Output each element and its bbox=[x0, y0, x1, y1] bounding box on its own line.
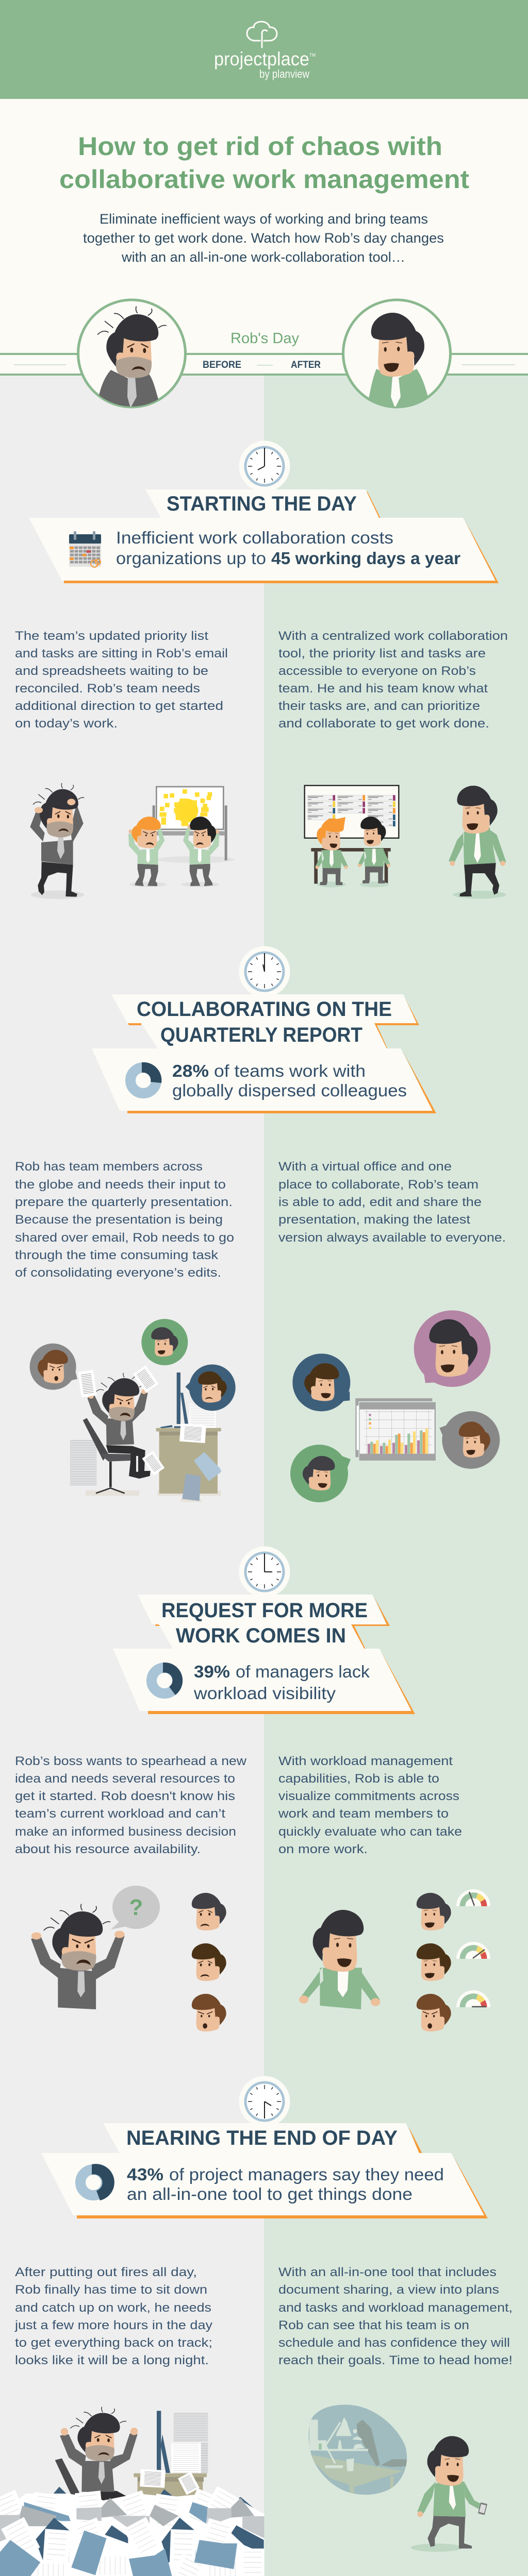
stat panel: 28 percent bbox=[92, 1048, 436, 1113]
text: end of day before: to get everything back on track; bbox=[15, 2336, 212, 2350]
text: request for more work after: quickly evaluate who can take bbox=[278, 1825, 462, 1839]
stat panel: 28 percent: globally dispersed colleagues bbox=[172, 1081, 407, 1100]
text: request for more work before: idea and needs several resources to bbox=[15, 1772, 235, 1786]
speech bubble: gray colleague bbox=[30, 1344, 77, 1390]
text: end of day after: Rob can see that his team is on bbox=[278, 2318, 469, 2332]
banner: starting the day heading bbox=[145, 489, 382, 520]
stat panel: 45 working days bbox=[29, 518, 499, 583]
background: left before column bbox=[0, 376, 264, 2576]
banner: request for more work heading: WORK COMES IN bbox=[176, 1624, 346, 1647]
intro panel bbox=[0, 99, 528, 376]
icon: phone bbox=[478, 2502, 487, 2515]
banner: nearing the end of day heading: NEARING THE END OF DAY bbox=[126, 2127, 398, 2149]
stat panel: 45 working days: Inefficient work collaboration costs bbox=[116, 528, 393, 547]
text: quarterly report after: place to collaborate, Rob’s team bbox=[278, 1178, 478, 1192]
text: request for more work before: Rob’s boss wants to spearhead a new bbox=[15, 1754, 247, 1768]
text: end of day before bbox=[14, 2265, 212, 2367]
text: starting the day before: additional direction to get started bbox=[15, 699, 223, 713]
text: starting the day before: and tasks are sitting in Rob’s email bbox=[15, 647, 228, 660]
text: quarterly report before: prepare the quarterly presentation. bbox=[15, 1195, 233, 1209]
chair bbox=[83, 1418, 133, 1493]
stat panel: 39 percent: 39% bbox=[194, 1662, 230, 1681]
figure: Rob seated, arms raised bbox=[87, 1373, 151, 1479]
intro text: with an an all-in-one work-collaboration tool… bbox=[121, 249, 405, 265]
floor shadows bbox=[86, 1490, 221, 1502]
text: quarterly report after: With a virtual office and one bbox=[278, 1160, 452, 1174]
text: end of day after: document sharing, a view into plans bbox=[278, 2283, 499, 2297]
text: request for more work after: on more work. bbox=[278, 1842, 368, 1856]
speech bubble: purple Rob bbox=[414, 1310, 490, 1387]
text: starting the day after: accessible to everyone on Rob’s bbox=[278, 664, 476, 678]
text: starting the day after bbox=[278, 629, 508, 731]
text: starting the day before: and spreadsheets waiting to be bbox=[15, 664, 208, 678]
text: quarterly report before bbox=[15, 1160, 234, 1280]
text: end of day before: Rob finally has time to sit down bbox=[15, 2283, 207, 2297]
paper stack on floor bbox=[43, 1440, 123, 1485]
header band bbox=[0, 0, 528, 99]
speech bubble: green colleague bbox=[141, 1319, 188, 1365]
heads: stressed team bbox=[192, 1893, 226, 2031]
title: collaborative work management bbox=[59, 165, 469, 194]
text: starting the day before bbox=[15, 629, 228, 731]
speech bubble: question mark: ? bbox=[129, 1895, 143, 1920]
text: end of day before: looks like it will be a long night. bbox=[15, 2353, 209, 2367]
illustration: Rob at desk overwhelmed by colleagues bbox=[30, 1319, 236, 1502]
text: starting the day after: and collaborate to get work done. bbox=[278, 717, 489, 731]
text: starting the day before: The team’s updated priority list bbox=[15, 629, 208, 643]
banner: collaborating heading: QUARTERLY REPORT bbox=[160, 1024, 362, 1046]
monitor bbox=[160, 1372, 188, 1428]
figure: dark-haired teammate bbox=[182, 817, 219, 887]
text: end of day before: After putting out fires all day, bbox=[15, 2265, 197, 2279]
text: starting the day after: With a centralized work collaboration bbox=[278, 629, 508, 643]
text: quarterly report before: through the time consuming task bbox=[15, 1248, 219, 1262]
text: quarterly report after: version always available to everyone. bbox=[278, 1231, 506, 1245]
text: request for more work before: make an informed business decision bbox=[15, 1825, 236, 1839]
portrait: Rob before bbox=[78, 300, 186, 410]
icon: cloud tree bbox=[247, 22, 277, 47]
text: quarterly report before: of consolidating everyone’s edits. bbox=[15, 1266, 221, 1280]
logo: projectplace header bbox=[214, 22, 316, 80]
pile of papers and folders bbox=[0, 2486, 266, 2576]
heading: Rob's Day: Rob's Day bbox=[230, 330, 299, 347]
figure: happy Rob with phone bbox=[411, 2436, 487, 2552]
banner: collaborating heading: COLLABORATING ON THE bbox=[137, 998, 392, 1021]
banner: collaborating heading bbox=[111, 994, 419, 1052]
illustration: team at organised board and happy Rob bbox=[305, 786, 506, 899]
figure: happy Rob bbox=[449, 786, 506, 899]
illustration: Rob buried in paperwork bbox=[0, 2407, 266, 2576]
text: end of day after: and tasks and workload management, bbox=[278, 2301, 513, 2315]
figure: happy orange-haired teammate bbox=[316, 817, 348, 887]
speech bubble: question mark bbox=[111, 1886, 160, 1929]
figure: stressed Rob bbox=[30, 783, 84, 899]
text: starting the day after: their tasks are, and can prioritize bbox=[278, 699, 480, 713]
stat panel: 28 percent: 28% bbox=[172, 1061, 209, 1080]
text: request for more work before: team’s current workload and can’t bbox=[15, 1807, 225, 1821]
banner: request for more work heading: REQUEST FOR MORE bbox=[161, 1599, 368, 1622]
illustration: Rob heading home with phone bbox=[306, 2405, 487, 2552]
text: request for more work after: visualize commitments across bbox=[278, 1789, 459, 1803]
folders on floor bbox=[182, 1452, 221, 1501]
label: before: BEFORE bbox=[203, 360, 241, 370]
speech bubble: blue colleague bbox=[185, 1364, 236, 1411]
text: end of day after: schedule and has confidence they will bbox=[278, 2336, 510, 2350]
stat panel: 45 working days: organizations up to bbox=[116, 549, 266, 568]
clock: starting the day bbox=[239, 441, 290, 492]
text: request for more work before: about his resource availability. bbox=[15, 1842, 201, 1856]
intro text: together to get work done. Watch how Rob’s day changes bbox=[83, 230, 444, 246]
stat panel: 28 percent: of teams work with bbox=[214, 1061, 366, 1080]
stat panel: 39 percent: workload visibility bbox=[193, 1684, 336, 1703]
clock: nearing the end of day bbox=[239, 2076, 290, 2127]
stat panel: 43 percent: of project managers say they need bbox=[169, 2165, 444, 2184]
text: starting the day after: team. He and his team know what bbox=[278, 682, 488, 696]
organised task board bbox=[305, 786, 399, 838]
stat panel: 39 percent bbox=[113, 1649, 415, 1714]
logo wordmark: projectplace bbox=[214, 48, 309, 70]
chart: donut 39 percent bbox=[152, 1663, 183, 1695]
banner: nearing the end of day heading bbox=[103, 2123, 423, 2155]
background: right after column bbox=[264, 376, 528, 2576]
text: quarterly report before: shared over email, Rob needs to go bbox=[15, 1231, 234, 1245]
text: request for more work after: With workload management bbox=[278, 1754, 453, 1768]
text: quarterly report before: Because the presentation is being bbox=[15, 1213, 223, 1227]
stat panel: 39 percent: of managers lack bbox=[236, 1662, 370, 1681]
text: request for more work before: get it started. Rob doesn't know his bbox=[15, 1789, 235, 1803]
text: end of day after: reach their goals. Time to head home! bbox=[278, 2353, 513, 2367]
vignette: tidy desk bbox=[306, 2405, 407, 2495]
stat panel: 43 percent: 43% bbox=[127, 2165, 163, 2184]
clock: quarterly report bbox=[239, 946, 290, 997]
text: end of day before: and catch up on work, he needs bbox=[15, 2301, 211, 2315]
portrait: Rob after bbox=[343, 300, 451, 410]
chart: bar chart report bbox=[355, 1398, 436, 1461]
text: starting the day before: on today’s work. bbox=[15, 717, 118, 731]
illustration: Rob unsure of team workload bbox=[31, 1886, 226, 2031]
stat panel: 45 working days: 45 working days a year bbox=[271, 549, 460, 568]
table bbox=[311, 848, 391, 884]
icon: calendar bbox=[69, 531, 101, 567]
figure: confused Rob bbox=[31, 1904, 125, 2009]
chart: donut 43 percent bbox=[80, 2164, 114, 2200]
desk bbox=[156, 1428, 221, 1494]
double rule strip bbox=[0, 354, 528, 375]
banner: request for more work heading bbox=[138, 1595, 390, 1652]
title: How to get rid of chaos with bbox=[78, 132, 442, 161]
figure: Rob, arms raised bbox=[55, 2407, 138, 2505]
text: quarterly report before: the globe and needs their input to bbox=[15, 1178, 226, 1192]
whiteboard with sticky notes bbox=[153, 787, 235, 863]
text: quarterly report after: presentation, making the latest bbox=[278, 1213, 470, 1227]
chart: donut 28 percent bbox=[130, 1062, 161, 1093]
logo tagline: by planview bbox=[259, 67, 309, 80]
text: starting the day after: tool, the priority list and tasks are bbox=[278, 647, 486, 660]
speech bubble: gray colleague bbox=[439, 1411, 500, 1469]
intro text: Eliminate inefficient ways of working and bring teams bbox=[100, 211, 428, 227]
text: request for more work after bbox=[278, 1754, 462, 1856]
text: starting the day before: reconciled. Rob’s team needs bbox=[15, 682, 200, 696]
heads and gauges: team workload bbox=[417, 1889, 490, 2031]
monitor and desk bbox=[134, 2411, 207, 2501]
text: quarterly report before: Rob has team members across bbox=[15, 1160, 203, 1174]
intro text bbox=[83, 211, 444, 265]
stat panel: 43 percent bbox=[41, 2153, 488, 2218]
illustration: Rob with workload gauges bbox=[299, 1889, 490, 2031]
illustration: colleagues sharing a live report bbox=[290, 1310, 500, 1502]
title bbox=[59, 132, 469, 194]
label: after: AFTER bbox=[291, 360, 321, 370]
text: quarterly report after bbox=[278, 1160, 506, 1245]
figure: confident Rob bbox=[299, 1910, 380, 2009]
text: end of day after: With an all-in-one tool that includes bbox=[278, 2265, 497, 2279]
illustration: stressed Rob and team at messy whiteboard bbox=[30, 783, 235, 899]
figure: orange-haired teammate bbox=[128, 817, 167, 887]
paper stack on desk bbox=[189, 1403, 216, 1428]
trademark: TM bbox=[309, 53, 316, 58]
flying papers bbox=[78, 1365, 206, 1476]
speech bubble: green colleague bbox=[290, 1445, 351, 1502]
clock: request for more work bbox=[239, 1547, 290, 1597]
stat panel: 43 percent: an all-in-one tool to get things done bbox=[127, 2184, 412, 2204]
text: request for more work after: work and team members to bbox=[278, 1807, 449, 1821]
text: end of day before: just a few more hours in the day bbox=[14, 2318, 212, 2332]
figure: happy dark-haired teammate bbox=[358, 817, 390, 887]
text: end of day after bbox=[278, 2265, 513, 2367]
speech bubble: blue colleague bbox=[292, 1353, 350, 1411]
text: request for more work before bbox=[15, 1754, 247, 1856]
banner: starting the day heading: STARTING THE DAY bbox=[167, 493, 357, 515]
text: request for more work after: capabilities, Rob is able to bbox=[278, 1772, 439, 1786]
text: quarterly report after: is able to add, edit and share the bbox=[278, 1195, 482, 1209]
